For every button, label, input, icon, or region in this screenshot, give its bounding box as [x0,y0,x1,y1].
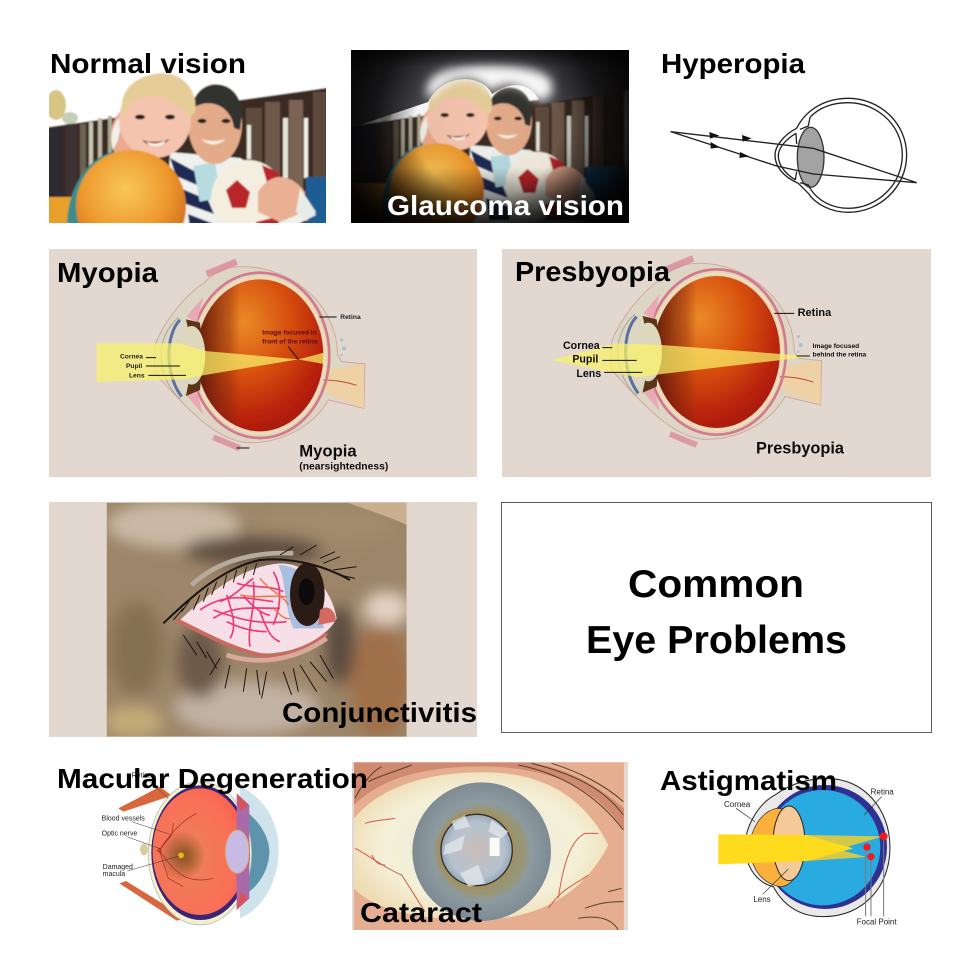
diagram: eye with damaged macula: Damaged [103,864,133,871]
heading: macular degeneration: Macular Degeneration [57,763,368,794]
panel: cataract [352,762,628,930]
diagram: myopic eye: (nearsightedness) [299,461,388,472]
diagram: eye with damaged macula: Retina [132,773,152,780]
panel: astigmatism [660,765,897,927]
heading: hyperopia: Hyperopia [661,48,805,79]
heading: cataract: Cataract [360,897,482,928]
diagram: presbyopic eye: behind the retina [813,352,867,359]
panel: macular degeneration [57,763,368,925]
panel: myopia [49,249,477,477]
heading: astigmatism: Astigmatism [660,765,837,796]
panel background [49,249,477,477]
panel background [502,249,931,477]
diagram: myopic eye: Retina [340,314,361,321]
heading: presbyopia: Presbyopia [515,256,670,287]
title frame [502,502,932,732]
panel: conjunctivitis [49,502,477,738]
diagram: eye with multiple focal points [718,778,897,927]
heading: glaucoma vision: Glaucoma vision [387,190,624,221]
title: common eye problems: Eye Problems [586,619,847,662]
diagram: eye with damaged macula: macula [103,871,125,878]
heading: myopia: Myopia [57,257,158,288]
diagram: eye with damaged macula: Blood vessels [102,815,145,822]
panel: presbyopia [502,249,931,477]
diagram: presbyopic eye: Pupil [572,354,598,366]
panel: glaucoma vision [351,50,629,223]
heading: conjunctivitis: Conjunctivitis [282,697,477,728]
diagram: eye with multiple focal points: Focal Point [857,918,897,927]
diagram: eye with multiple focal points: Retina [871,787,894,796]
photo: eye with cloudy lens [354,762,624,930]
diagram: presbyopic eye: Retina [798,307,832,319]
panel: main title box [502,502,932,732]
strip behind photo [352,762,628,930]
diagram: myopic eye: Image focused in [262,329,317,336]
diagram: myopic eye [97,262,388,472]
diagram: eye with multiple focal points: Lens [753,895,771,904]
diagram: eye with multiple focal points: Cornea [724,800,751,809]
diagram: presbyopic eye: Lens [576,368,601,380]
diagram: presbyopic eye: Cornea [563,340,600,352]
photo: tunnel vision version [351,50,629,223]
panel: hyperopia [661,48,917,212]
panel: normal vision [49,53,326,223]
diagram: eye with damaged macula [102,773,279,925]
photo: red eye [103,502,410,738]
diagram: myopic eye: Cornea [120,353,143,360]
diagram: presbyopic eye [552,258,867,458]
photo: two boys with balls [49,72,326,223]
panel background [49,502,477,737]
diagram: presbyopic eye: Presbyopia [756,440,845,458]
diagram: myopic eye: Lens [129,372,145,379]
diagram: presbyopic eye: Image focused [813,343,859,350]
title: common eye problems [586,563,847,662]
diagram: myopic eye: front of the retina [262,338,318,345]
diagram: eye with rays [671,98,917,212]
title: common eye problems: Common [628,563,804,606]
diagram: eye with damaged macula: Optic nerve [102,830,137,837]
diagram: myopic eye: Myopia [299,442,357,461]
diagram: myopic eye: Pupil [126,363,142,370]
heading: normal vision: Normal vision [50,48,246,79]
